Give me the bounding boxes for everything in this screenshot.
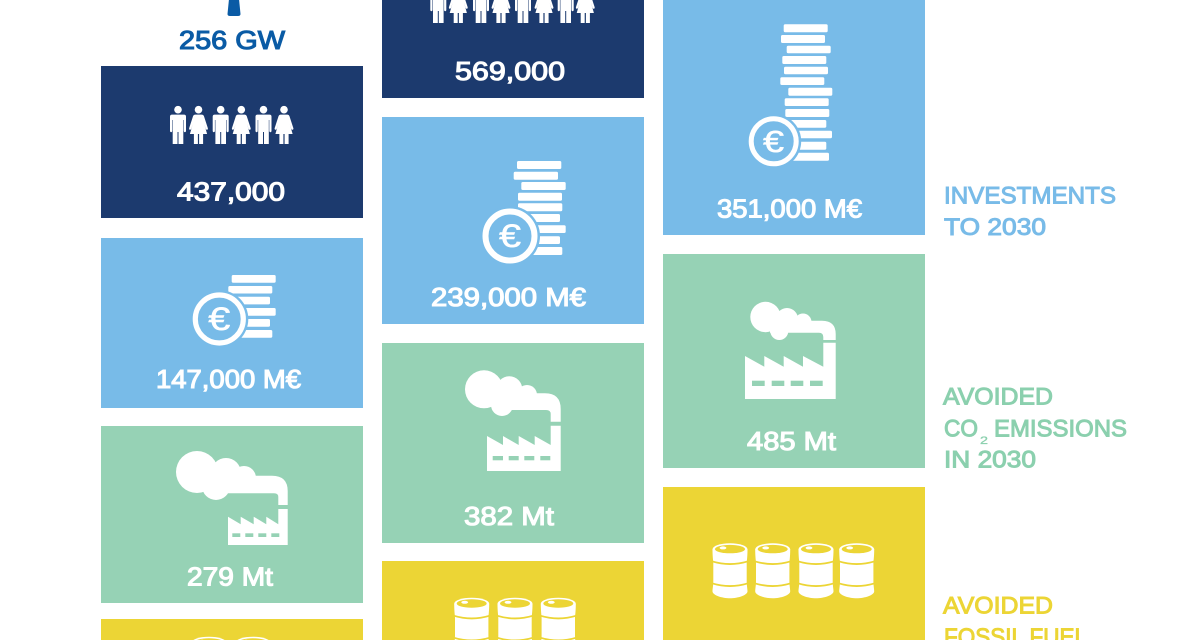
icon: coin stack: €: [763, 124, 784, 159]
panel background: [382, 343, 644, 543]
value: 351,000 M€: [717, 194, 863, 224]
panel: avoided emissions, column 2: [382, 343, 644, 543]
panel background: [382, 117, 644, 324]
panel: investments, column 3: [663, 0, 925, 235]
icon: factory with smoke: [465, 370, 561, 471]
label: avoided CO2 emissions in 2030: IN 2030: [944, 447, 1036, 474]
icon: oil barrels: [191, 637, 271, 640]
icon: coin stack: €: [208, 301, 231, 337]
wind capacity value: 256 GW: [179, 25, 286, 55]
panel background: [101, 619, 363, 640]
label: avoided CO2 emissions in 2030: [943, 383, 1127, 474]
value: 279 Mt: [187, 562, 274, 592]
panel: fossil fuel, column 2: [382, 561, 644, 640]
panel: fossil fuel, column 3: [663, 487, 925, 640]
value: 382 Mt: [464, 501, 555, 531]
panel background: [101, 426, 363, 603]
panel: avoided emissions, column 3: [663, 254, 925, 468]
panel background: [382, 561, 644, 640]
value: 437,000: [177, 176, 285, 206]
panel: jobs, column 2: [382, 0, 644, 98]
icon: coin stack: €: [499, 218, 521, 254]
panel background: [101, 238, 363, 408]
panel background: [663, 487, 925, 640]
value: 485 Mt: [747, 426, 837, 456]
icon: eight people: [430, 0, 595, 23]
icon: oil barrels: [454, 598, 576, 640]
label: avoided CO2 emissions in 2030: CO: [944, 416, 978, 443]
label: investments to 2030: [944, 182, 1116, 241]
label: avoided CO2 emissions in 2030: EMISSIONS: [994, 416, 1127, 443]
value: 147,000 M€: [156, 364, 302, 394]
label: avoided CO2 emissions in 2030: 2: [980, 435, 988, 447]
icon: factory with smoke: [176, 451, 288, 545]
value: 569,000: [455, 56, 565, 86]
label: investments to 2030: INVESTMENTS: [944, 182, 1116, 209]
panel: jobs, column 1: [101, 66, 363, 218]
panel: fossil fuel, column 1: [101, 619, 363, 640]
icon: coin stack: [190, 275, 276, 348]
icon: factory with smoke: [745, 302, 836, 399]
panel background: [382, 0, 644, 98]
panel: avoided emissions, column 1: [101, 426, 363, 603]
panel background: [663, 0, 925, 235]
panel: investments, column 1: [101, 238, 363, 408]
icon: coin stack: [746, 24, 832, 169]
label: investments to 2030: TO 2030: [944, 214, 1046, 241]
icon: oil barrels: [712, 543, 875, 598]
icon: coin stack: [480, 161, 566, 266]
icon: wind turbine tower: [228, 0, 240, 16]
label: avoided fossil fuel: AVOIDED: [943, 592, 1053, 619]
panel background: [663, 254, 925, 468]
icon: six people: [170, 106, 293, 144]
panel background: [101, 66, 363, 218]
label: avoided CO2 emissions in 2030: AVOIDED: [943, 383, 1053, 410]
panel: investments, column 2: [382, 117, 644, 324]
label: avoided fossil fuel: [943, 592, 1087, 640]
value: 239,000 M€: [431, 282, 587, 312]
